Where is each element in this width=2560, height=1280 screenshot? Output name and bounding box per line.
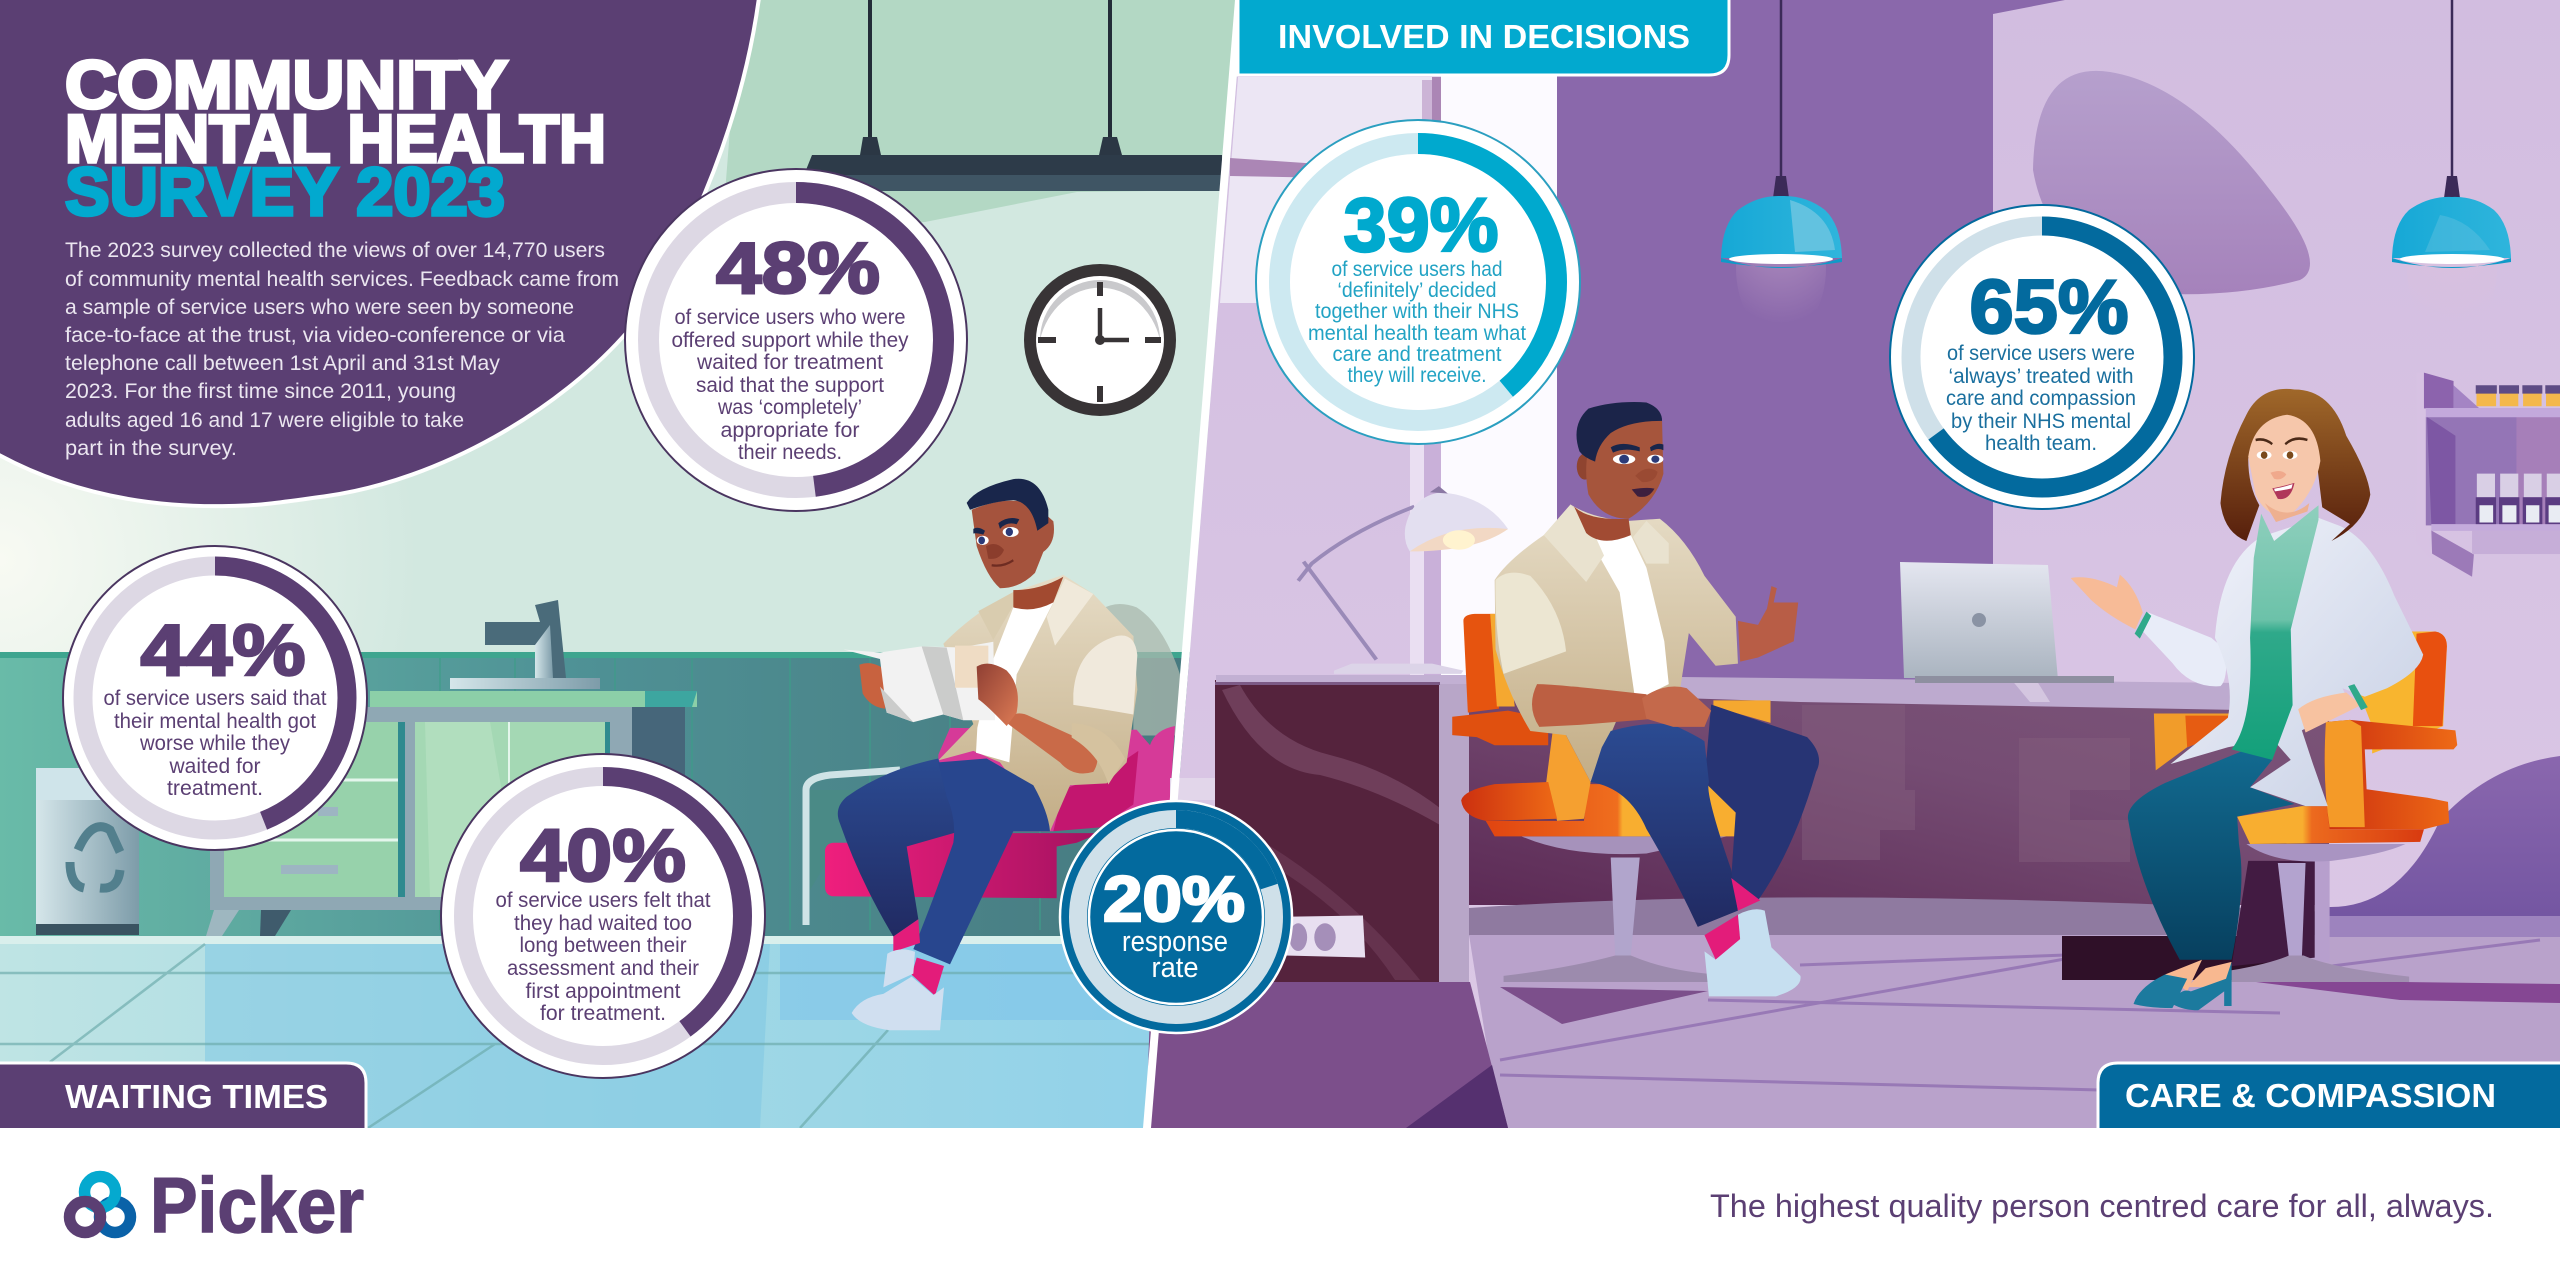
cabinet bbox=[206, 691, 697, 936]
logo wordmark: Picker bbox=[150, 1161, 364, 1249]
face features bbox=[973, 518, 1019, 566]
right cuff bbox=[2348, 684, 2368, 710]
intro paragraph: adults aged 16 and 17 were eligible to take bbox=[65, 409, 464, 432]
bottle lids bbox=[2476, 385, 2560, 394]
stat circle: 20% response rate: rate bbox=[1152, 952, 1198, 984]
icon: tap bbox=[450, 600, 600, 689]
icon: wall clock bbox=[1030, 270, 1170, 410]
chair back shadow bbox=[1102, 604, 1180, 736]
panel: waiting room illustration bbox=[0, 0, 1245, 1128]
green top bbox=[2232, 505, 2319, 760]
stat circle: 44%: worse while they bbox=[139, 732, 290, 755]
floor bbox=[0, 936, 1245, 1128]
wall glow bbox=[0, 440, 500, 652]
raised hand bbox=[2071, 575, 2143, 629]
sleeve highlight bbox=[1073, 635, 1137, 715]
stat circle: 40% bbox=[441, 754, 765, 1078]
ceiling wedge bbox=[1993, 0, 2065, 14]
stat circle: 20% response rate: 20% bbox=[1103, 863, 1245, 935]
stat circle: 65%: ‘always’ treated with bbox=[1948, 365, 2134, 388]
right hand bbox=[2298, 692, 2361, 732]
stat circle: 65% bbox=[1890, 205, 2194, 509]
stat circle: 48%: offered support while they bbox=[672, 329, 909, 352]
stat circle: 48%: waited for treatment bbox=[696, 351, 883, 374]
upper green wall bbox=[722, 0, 1245, 232]
front leg bbox=[1591, 724, 1738, 927]
collar bbox=[1047, 579, 1093, 646]
panel: consulting room illustration bbox=[1146, 0, 2560, 1128]
stat circle: 48%: of service users who were bbox=[674, 306, 906, 329]
stat circle: 44%: 44% bbox=[140, 611, 306, 691]
stat circle: 65%: health team. bbox=[1985, 432, 2097, 455]
footer bbox=[0, 1128, 2560, 1280]
stat circle: 39%: of service users had bbox=[1332, 258, 1502, 281]
stat circle: 39%: they will receive. bbox=[1348, 364, 1486, 387]
stat circle: 39%: 39% bbox=[1344, 183, 1498, 268]
stat circle: 65%: care and compassion bbox=[1946, 387, 2136, 410]
intro paragraph: 2023. For the first time since 2011, young bbox=[65, 380, 456, 403]
purple wall bbox=[1557, 0, 1993, 690]
stat circle: 44%: their mental health got bbox=[114, 710, 316, 733]
shoes bbox=[1704, 909, 1801, 996]
bottles top row bbox=[2476, 389, 2560, 406]
picker logo bbox=[70, 1161, 364, 1249]
gesturing hand bbox=[1738, 586, 1798, 662]
title: SURVEY 2023 bbox=[65, 154, 505, 230]
stat circle: 65%: of service users were bbox=[1947, 342, 2135, 365]
stat circle: 48%: said that the support bbox=[696, 374, 884, 397]
stat circle: 39%: together with their NHS bbox=[1315, 300, 1519, 323]
doctor bbox=[2071, 389, 2457, 1010]
back leg bbox=[1704, 704, 1819, 900]
jar labels bbox=[2479, 505, 2560, 522]
back leg bbox=[838, 759, 960, 936]
sleeve highlight bbox=[1495, 573, 1566, 674]
tab: care and compassion bbox=[2098, 1063, 2560, 1130]
stat circle: 48% bbox=[625, 169, 967, 511]
stat circle: 39%: ‘definitely’ decided bbox=[1338, 279, 1496, 302]
arm bbox=[1003, 713, 1097, 773]
t-shirt bbox=[976, 602, 1053, 762]
t-shirt bbox=[1586, 533, 1669, 700]
head bbox=[1586, 421, 1663, 519]
hair bbox=[1576, 402, 1662, 462]
floor right bbox=[1146, 935, 2560, 1128]
purple background shape bbox=[0, 0, 760, 506]
icon: blue pendant lamp right bbox=[2392, 0, 2511, 338]
title bbox=[65, 47, 606, 230]
stat circle: 39% bbox=[1256, 120, 1580, 444]
collars bbox=[1544, 504, 1669, 582]
stat circle: 20% response rate: response bbox=[1122, 926, 1228, 958]
socks bbox=[893, 919, 944, 996]
tab: waiting times bbox=[0, 1063, 366, 1130]
socks bbox=[1704, 878, 1760, 960]
intro paragraph: face-to-face at the trust, via video-conference or via bbox=[65, 324, 565, 347]
hair bbox=[2220, 389, 2370, 541]
title: COMMUNITY bbox=[65, 47, 508, 123]
stat circle: 39%: care and treatment bbox=[1332, 343, 1502, 366]
tab: care and compassion: CARE & COMPASSION bbox=[2125, 1077, 2496, 1114]
wall socket bbox=[1285, 916, 1365, 958]
back desk bbox=[1469, 677, 2329, 936]
hand on knee bbox=[1642, 686, 1711, 727]
jars bbox=[2476, 497, 2560, 524]
jacket bbox=[1495, 504, 1738, 782]
icon: blue pendant lamp left bbox=[1721, 0, 1842, 338]
neck bbox=[1013, 577, 1063, 609]
stat circle: 40%: they had waited too bbox=[514, 912, 692, 935]
shoes bbox=[852, 949, 944, 1030]
intro paragraph: part in the survey. bbox=[65, 437, 237, 460]
face features bbox=[2256, 439, 2307, 499]
left hand bbox=[859, 663, 890, 709]
stat circle: 48%: appropriate for bbox=[720, 419, 860, 442]
stat circle: 44%: treatment. bbox=[167, 777, 263, 800]
stat circle: 40%: assessment and their bbox=[507, 957, 699, 980]
head bbox=[972, 501, 1054, 588]
logo rings bbox=[70, 1176, 130, 1232]
left sleeve bbox=[2139, 613, 2226, 686]
paper bbox=[843, 642, 995, 722]
face features bbox=[1611, 444, 1663, 497]
orange chair bbox=[2154, 631, 2457, 982]
stat circle: 65%: by their NHS mental bbox=[1951, 410, 2131, 433]
intro paragraph: a sample of service users who were seen by someone bbox=[65, 296, 574, 319]
stat circle: 44%: of service users said that bbox=[104, 687, 327, 710]
tagline: The highest quality person centred care for all, always. bbox=[1710, 1188, 2494, 1224]
boxes bbox=[2477, 474, 2560, 497]
stat circle: 40%: long between their bbox=[520, 934, 687, 957]
left cuff bbox=[2135, 612, 2151, 639]
stat circle: 44%: waited for bbox=[169, 755, 261, 778]
shoes bbox=[2134, 962, 2232, 1010]
stat circle: 39%: mental health team what bbox=[1308, 322, 1526, 345]
ear bbox=[1577, 453, 1593, 480]
stat circle: 40%: for treatment. bbox=[540, 1002, 666, 1025]
stat circle: 65%: 65% bbox=[1970, 265, 2128, 350]
face bbox=[2248, 415, 2320, 518]
desk lamp bbox=[1298, 486, 1508, 674]
skirting right bbox=[2329, 916, 2560, 937]
side desk bbox=[1215, 675, 1470, 982]
icon: ceiling lamp bbox=[804, 0, 1222, 191]
jacket bbox=[938, 575, 1137, 831]
stat circle: 40%: of service users felt that bbox=[496, 889, 711, 912]
tab: involved in decisions: INVOLVED IN DECISIONS bbox=[1278, 18, 1690, 55]
stat circle: 48%: their needs. bbox=[738, 441, 842, 464]
right fist bbox=[977, 664, 1018, 726]
wall blob bbox=[2033, 71, 2310, 294]
stat circle: 48%: was ‘completely’ bbox=[717, 396, 862, 419]
stat circle: 44% bbox=[63, 546, 367, 850]
icon: recycling bin bbox=[36, 768, 139, 935]
panel: introduction bbox=[0, 0, 760, 506]
floor wave bbox=[2329, 756, 2560, 916]
window bbox=[1220, 75, 1558, 680]
trousers bbox=[2128, 749, 2294, 960]
chair frame bbox=[806, 770, 900, 925]
intro paragraph bbox=[65, 239, 619, 460]
lab coat bbox=[2171, 518, 2423, 806]
neck bbox=[1574, 507, 1631, 541]
icon: shelf with bottles bbox=[2417, 373, 2560, 577]
stat circle: 40%: 40% bbox=[520, 814, 686, 897]
tab: involved in decisions bbox=[1238, 0, 1729, 75]
intro paragraph: telephone call between 1st April and 31st May bbox=[65, 352, 500, 375]
man talking bbox=[1452, 402, 1819, 996]
divider bbox=[1143, 0, 1243, 1128]
intro paragraph: of community mental health services. Feedback came from bbox=[65, 268, 619, 291]
tiled wall band bbox=[0, 652, 1245, 936]
skirting bbox=[1170, 778, 1220, 800]
orange chair bbox=[1452, 614, 1771, 982]
laptop bbox=[1900, 562, 2114, 683]
neck bbox=[2265, 503, 2309, 522]
wall bbox=[0, 0, 1245, 940]
tab: waiting times: WAITING TIMES bbox=[65, 1078, 328, 1115]
wall bbox=[1151, 0, 2560, 1128]
front leg bbox=[913, 759, 1050, 964]
title: MENTAL HEALTH bbox=[65, 101, 606, 177]
feet bbox=[2165, 960, 2232, 991]
stat circle: 40%: first appointment bbox=[526, 980, 681, 1003]
pink armchair bbox=[825, 726, 1175, 898]
hair bbox=[967, 479, 1048, 531]
stat circle: 48%: 48% bbox=[716, 229, 880, 309]
intro paragraph: The 2023 survey collected the views of over 14,770 users bbox=[65, 239, 605, 262]
left collar bbox=[978, 592, 1013, 640]
forearm bbox=[1532, 684, 1655, 727]
man reading bbox=[825, 479, 1180, 1030]
stat circle: 20% response rate bbox=[1060, 801, 1292, 1033]
cuff bbox=[1072, 723, 1125, 785]
